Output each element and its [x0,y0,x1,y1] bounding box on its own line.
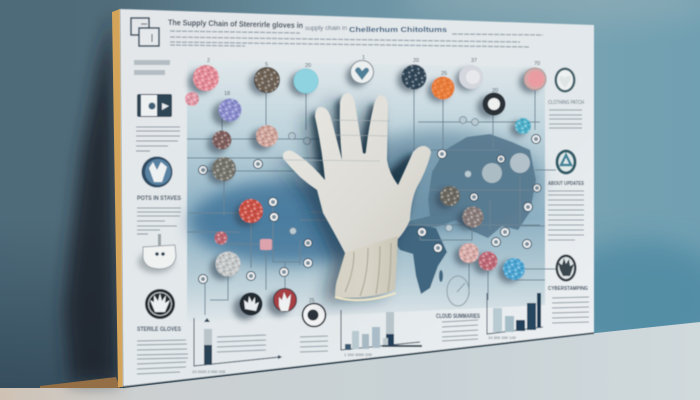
glove cuff rim [335,293,396,300]
poster board [120,9,594,387]
medallion: tan dark [254,68,280,92]
medallion: red [239,199,263,223]
numbers above medallions: 20 [413,58,419,64]
chart: lower left bars [192,318,282,374]
glove cuff folds [345,243,391,296]
medallion: red hand [274,288,296,312]
floor [0,322,700,400]
heading: sterile gloves: STERILE GLOVES [137,326,182,333]
medallion: tan pink [256,125,278,147]
glove hand [283,93,431,262]
medallion: grey right [440,186,460,206]
text block: lower left [137,340,188,374]
medallion: ring icon [302,304,326,326]
map: Africa landmass [395,224,447,294]
caption lines: centre [300,336,328,352]
medallion: pink [193,65,219,91]
glove [283,93,431,300]
medallion: black ring [482,92,506,116]
numbers above medallions: 2 [207,58,210,64]
icon: hand badge [145,289,175,319]
medallion: orange [432,76,454,100]
numbers above medallions: 18 [224,91,230,97]
text block: cloud summaries [442,320,478,341]
numbers above medallions: 25 [441,71,447,77]
right icon: recycle badge [556,150,576,174]
faint lines over glove [285,120,390,161]
numbers above medallions: 20 [492,88,498,94]
subtitle highlight: Chellerhum Chitoltums [349,27,447,34]
glove cuff [335,236,398,298]
icon: plug device [138,234,176,273]
medallion: pale pink [459,243,479,263]
medallion: small pink [185,92,199,106]
chart: centre bars [341,310,422,357]
chart caption lines [217,335,266,352]
medallion: grey [212,157,236,181]
map: island [439,270,443,282]
chart: right bars [487,293,543,340]
intro text lines [170,31,543,47]
medallion: dark navy [402,64,426,90]
medallion: heart [350,60,374,84]
medallion: white speckled [216,252,240,276]
numbers above medallions: 70 [534,61,540,67]
glove shadow [271,96,423,303]
right text block 3 [552,297,589,323]
chart: centre bars: 1 100 3000 200 [344,352,373,357]
icon: card with arrow [137,94,172,117]
map panel [187,60,545,322]
right heading: cyberstamping: CYBERSTAMPING [548,286,588,292]
right heading: clothing patch: CLOTHING PATCH [548,100,584,106]
right text block 2 [548,191,584,240]
icon: gloves badge [142,156,172,188]
subtitle: supply chain in [305,25,347,32]
left side labels [134,60,170,75]
number label: 25 [309,298,315,304]
text block under heading [137,208,181,234]
right icon: heart badge [554,68,576,92]
right icon: hand badge [556,254,576,282]
clock outline [447,276,469,306]
numbers above medallions: 37 [471,58,477,64]
heading: pots in staves: POTS IN STAVES [137,195,182,202]
medallion: pink square [260,239,272,250]
medallion: cyan small [515,118,531,134]
numbers above medallions: 20 [305,63,311,69]
medallion: black hand [240,292,262,316]
medallion: pink right [524,68,546,90]
medallion: purple [218,98,242,122]
medallion: cyan [294,68,318,94]
medallion: blue [503,258,525,280]
board shadow on wall [64,15,118,382]
medallion: grey brown [462,206,484,228]
medallion: rose [478,252,498,270]
chart: lower left bars: 10 2020 2 000 100 [192,369,226,374]
icon: overlapping squares [131,18,159,46]
board edge [112,9,123,387]
medallion: brown [212,130,232,150]
left text block [136,127,180,151]
medallion: translucent 1 [482,163,502,183]
numbers above medallions: 1 [362,55,365,61]
small numbered nodes [198,116,541,284]
wood ledge [40,377,120,388]
medallion shadows [188,65,541,320]
right text block 1 [549,110,582,128]
medallion: translucent 2 [510,153,530,173]
medallion: pink dot [214,232,228,244]
connection lines [187,88,558,315]
right heading: about updates: ABOUT UPDATES [548,181,584,187]
numbers above medallions [207,55,540,97]
chart: right bars: 10 300 200 100 [488,335,517,340]
heading: cloud summaries: CLOUD SUMMARIES [436,314,480,320]
map: Eurasia landmass [395,134,536,238]
medallion: white [459,65,483,89]
title: The Supply Chain of Stererirle gloves in [168,18,303,30]
numbers above medallions: 5 [265,62,268,68]
